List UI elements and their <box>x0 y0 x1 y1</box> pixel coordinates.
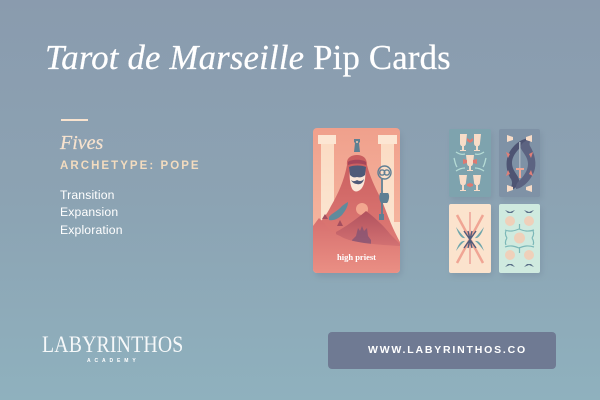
title: Tarot de Marseille Pip Cards <box>45 38 451 77</box>
subheading: archetype: ARCHETYPE: POPE <box>60 160 201 172</box>
keywords list: Expansion <box>60 205 118 219</box>
card: five of wands <box>449 204 493 276</box>
hills and temple <box>336 211 400 256</box>
robed figure <box>313 155 400 258</box>
url text: WWW.LABYRINTHOS.CO <box>368 344 527 356</box>
url button <box>328 332 556 369</box>
heading: Fives: Fives <box>60 132 103 154</box>
card: five of cups <box>449 129 493 200</box>
panel: card info <box>60 132 201 237</box>
bird <box>329 202 348 220</box>
card title: high priest <box>337 252 376 262</box>
logo wordmark: LABYRINTHOS <box>42 332 183 357</box>
keywords list <box>60 188 123 237</box>
keywords list: Transition <box>60 188 115 202</box>
sun <box>356 203 368 215</box>
logo tagline: ACADEMY <box>87 358 140 364</box>
key <box>378 166 391 216</box>
hat finial <box>354 139 360 152</box>
keywords list: Exploration <box>60 223 123 237</box>
logo: Labyrinthos Academy <box>42 332 183 364</box>
face <box>350 166 365 192</box>
accent line <box>61 119 88 121</box>
card: five of pentacles <box>499 204 542 276</box>
columns <box>318 135 400 244</box>
card: five of swords <box>499 129 542 200</box>
